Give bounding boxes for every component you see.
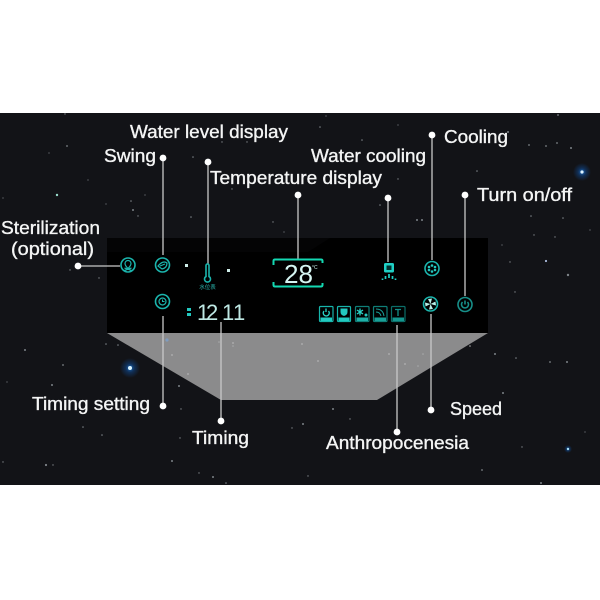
icon: mode antenna (392, 306, 405, 322)
icon: cooling (425, 262, 439, 276)
water level caption: 水位表 (199, 283, 216, 291)
icon: fan speed (424, 297, 438, 311)
label: timing setting: Timing setting (32, 393, 150, 414)
icon: mode snow (356, 306, 369, 322)
temperature readout: 28 (284, 259, 313, 289)
timing digits: 1211 (197, 300, 245, 325)
side dots beside thermometer (185, 264, 230, 272)
black control panel (107, 238, 488, 333)
blue star upper right (573, 163, 591, 181)
icon: swing (156, 258, 170, 272)
label: optional: (optional) (11, 238, 94, 259)
icon: mode wind (374, 306, 387, 322)
icon: timing setting (156, 294, 170, 308)
temperature readout: °C (312, 265, 318, 271)
label: cooling: Cooling (444, 126, 508, 147)
label: sterilization: Sterilization (1, 217, 100, 238)
mode icons row (320, 306, 405, 322)
timing colon (187, 308, 191, 316)
label: water level display: Water level display (130, 121, 289, 142)
label: timing: Timing (192, 427, 249, 448)
starry background (0, 113, 600, 485)
blue star lower left (120, 358, 140, 378)
icon: sterilization (121, 258, 135, 272)
label: temperature display: Temperature display (210, 167, 383, 188)
label: speed: Speed (450, 398, 502, 419)
icon: thermometer (205, 264, 211, 282)
temperature readout (274, 259, 322, 289)
icon: power (458, 298, 472, 312)
label: water cooling: Water cooling (311, 145, 426, 166)
icon: mode shield (338, 306, 350, 322)
connector lines (78, 135, 465, 432)
icon: water cooling (382, 263, 396, 280)
gray trapezoid (107, 333, 488, 400)
label: anthropocenesia: Anthropocenesia (326, 432, 470, 453)
icon: mode power (320, 306, 333, 322)
blue star far right lower (564, 445, 572, 453)
label: swing: Swing (104, 145, 156, 166)
connector dots (75, 132, 468, 435)
label: turn on/off: Turn on/off (477, 184, 573, 205)
